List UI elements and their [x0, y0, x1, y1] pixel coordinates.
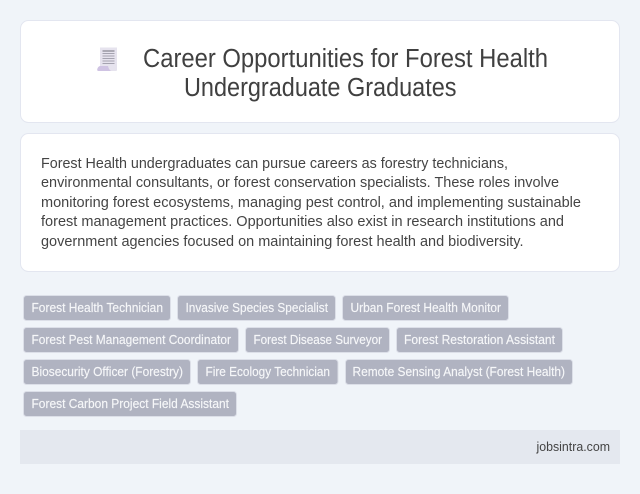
tag: Forest Pest Management Coordinator	[24, 328, 238, 352]
tag: Biosecurity Officer (Forestry)	[24, 360, 190, 384]
text block: description: government agencies focused on maintaining forest health and biodiversity.	[41, 234, 524, 250]
tag: Forest Carbon Project Field Assistant: Forest Carbon Project Field Assistant	[32, 396, 229, 411]
tag: Invasive Species Specialist: Invasive Species Specialist	[186, 300, 328, 315]
tag: Fire Ecology Technician: Fire Ecology Technician	[206, 364, 330, 379]
tag: Forest Disease Surveyor	[246, 328, 390, 352]
tag: Forest Restoration Assistant	[396, 328, 562, 352]
tag: Urban Forest Health Monitor	[342, 296, 508, 320]
text block: description: environmental consultants, or forest conservation specialists. These roles involve	[41, 175, 559, 191]
tag: Remote Sensing Analyst (Forest Health)	[346, 360, 572, 384]
tag: Forest Health Technician	[24, 296, 170, 320]
text block: description: monitoring forest ecosystems, managing pest control, and implementing sustainable	[41, 195, 581, 211]
tag: Forest Restoration Assistant: Forest Restoration Assistant	[404, 332, 555, 347]
title: Career Opportunities for Forest Health	[143, 45, 548, 73]
icon: paper scroll	[97, 48, 117, 71]
footer: jobsintra.com	[536, 439, 610, 454]
tag: Forest Disease Surveyor: Forest Disease Surveyor	[254, 332, 383, 347]
tag: Invasive Species Specialist	[178, 296, 336, 320]
title	[143, 45, 548, 102]
tag: Forest Pest Management Coordinator: Forest Pest Management Coordinator	[32, 332, 232, 347]
panel: header	[20, 20, 620, 122]
tag: Forest Carbon Project Field Assistant	[24, 392, 236, 416]
tag: Fire Ecology Technician	[198, 360, 338, 384]
text block: description: forest management practices. Opportunities also exist in research institutions and	[41, 214, 564, 230]
tag: Forest Health Technician: Forest Health Technician	[32, 300, 163, 315]
tag: Biosecurity Officer (Forestry): Biosecurity Officer (Forestry)	[32, 364, 183, 379]
tag: Remote Sensing Analyst (Forest Health): Remote Sensing Analyst (Forest Health)	[352, 364, 565, 379]
tag: Urban Forest Health Monitor: Urban Forest Health Monitor	[350, 300, 502, 315]
text block: description	[41, 156, 581, 250]
text block: description: Forest Health undergraduates can pursue careers as forestry technicians,	[41, 156, 508, 172]
panel: description	[20, 134, 620, 272]
tag list	[24, 296, 572, 416]
footer	[20, 430, 620, 464]
title: Undergraduate Graduates	[184, 74, 456, 102]
